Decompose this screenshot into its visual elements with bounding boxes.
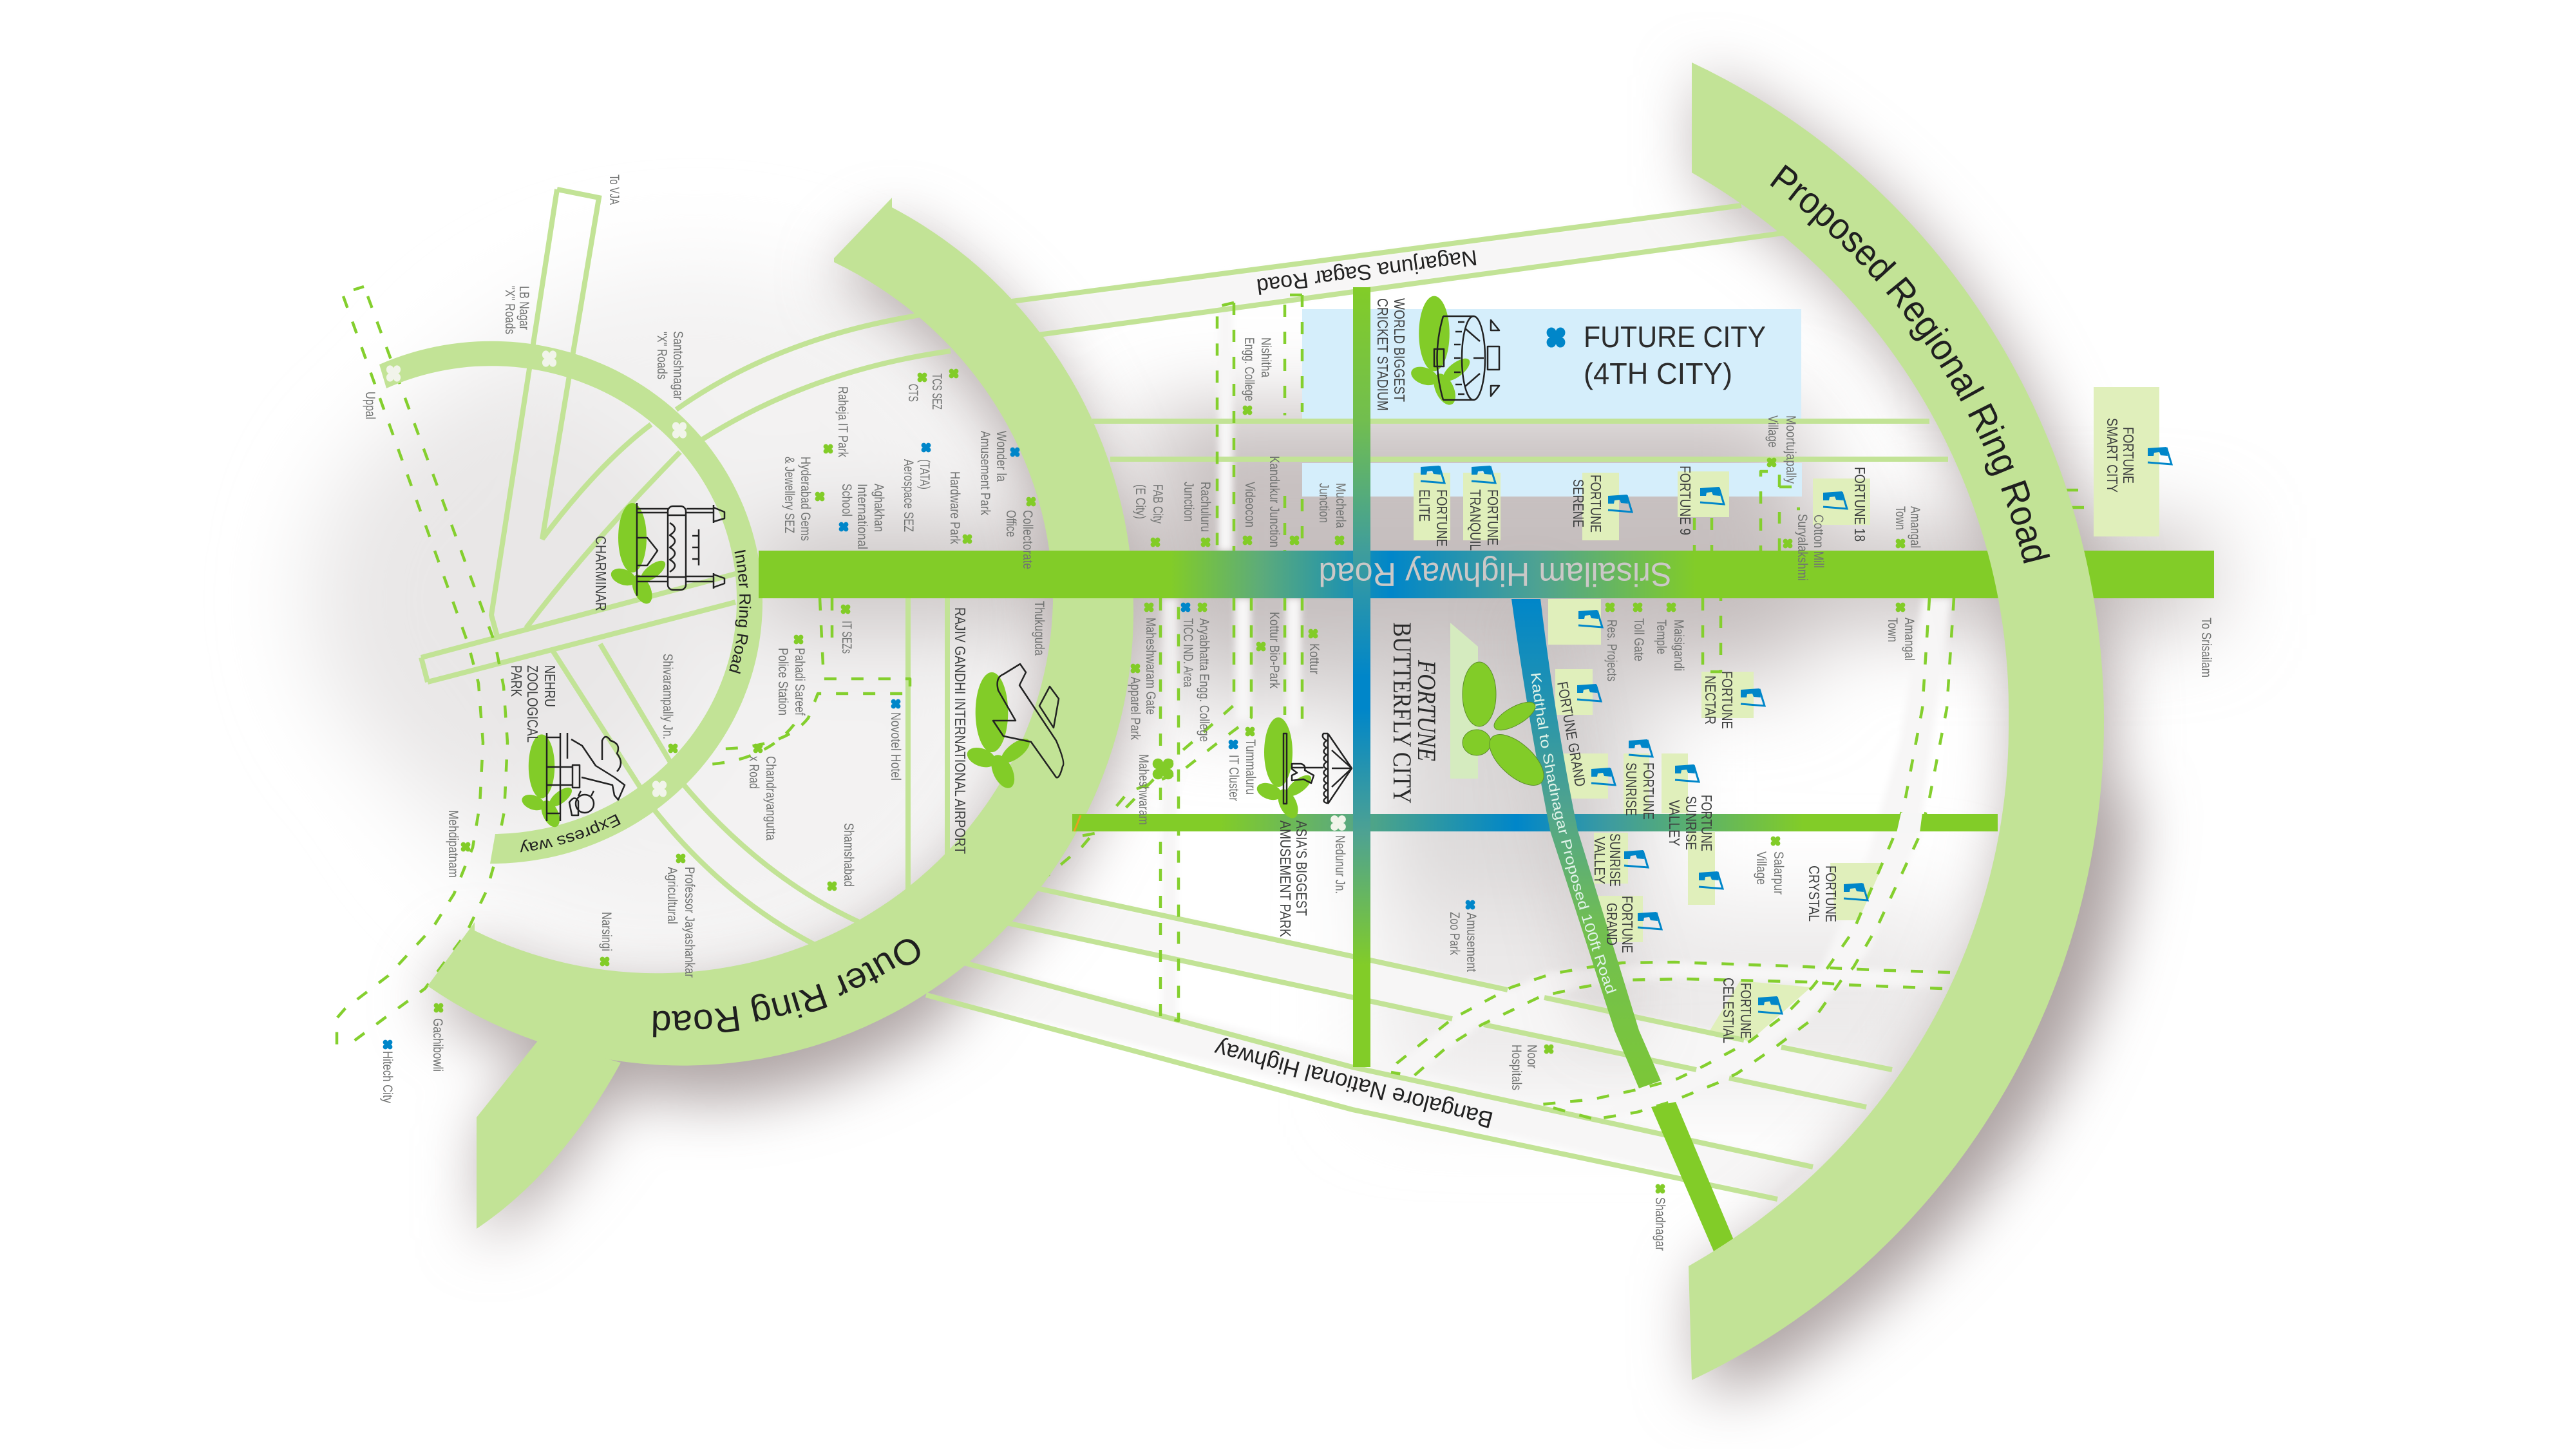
label: Amusement Zoo Park: Amusement xyxy=(1464,913,1479,972)
road name: Inner Ring Road: Inner Ring Road xyxy=(729,550,751,674)
label: Nedunur Jn.: Nedunur Jn. xyxy=(1332,835,1347,894)
road name: Bangalore National Highway: Bangalore National Highway xyxy=(1211,1036,1495,1133)
label: Fortune Elite: ELITE xyxy=(1416,489,1433,522)
label: Asia's biggest amusement park: ASIA'S BIGGEST xyxy=(1293,820,1310,916)
label: Fortune Grand upper: FORTUNE GRAND xyxy=(1554,680,1589,788)
soft grey ground shadows xyxy=(309,264,2208,1095)
road name: Kadthal to Shadnagar Proposed 100ft Road: Kadthal to Shadnagar Proposed 100ft Road xyxy=(1531,673,1616,994)
road name: Nagarjuna Sagar Road: Nagarjuna Sagar Road xyxy=(1255,245,1479,299)
markers: blue location points xyxy=(383,443,1475,1049)
label: Narsingi: Narsingi xyxy=(599,912,614,951)
label: Collectorate Office xyxy=(1003,510,1035,569)
label: Professor Jayashankar Agricultural: Agricultural xyxy=(665,867,679,924)
label: Chandrayangutta x Road: x Road xyxy=(746,756,761,789)
label: Fortune Sunrise: FORTUNE xyxy=(1640,762,1657,820)
label: Fortune Celestial: FORTUNE xyxy=(1738,983,1754,1039)
label: Salarpur Village: Salarpur xyxy=(1771,851,1786,895)
label: Fortune Celestial xyxy=(1720,978,1754,1043)
label: Fortune Nectar: FORTUNE xyxy=(1719,671,1736,729)
label: Hardware Park: Hardware Park xyxy=(947,471,962,544)
label: Gachibowli: Gachibowli xyxy=(430,1018,445,1072)
label: Maisigandi Temple: Maisigandi xyxy=(1671,620,1686,671)
label: FAB City: FAB City xyxy=(1150,484,1165,524)
label: Novotel Hotel: Novotel Hotel xyxy=(888,712,903,781)
label: Fortune Sunrise Valley xyxy=(1666,795,1715,851)
label: Maheshwaram Gate: Maheshwaram Gate xyxy=(1143,618,1158,715)
label: Pahadi Sareef Police Station: Police Station xyxy=(775,648,790,715)
label: Maisigandi Temple: Temple xyxy=(1654,620,1669,654)
label: Thukuguda: Thukuguda xyxy=(1032,601,1046,656)
heading: Future City callout: (4TH CITY) xyxy=(1584,357,1732,390)
label: Fortune Sunrise: SUNRISE xyxy=(1623,762,1640,816)
road name: Proposed Regional Ring Road: Proposed Regional Ring Road xyxy=(1770,165,2050,564)
label: Raheja IT Park: Raheja IT Park xyxy=(835,386,850,457)
label: Rachuluru Junction: Junction xyxy=(1181,482,1196,522)
label: Res. Projects: Res. Projects xyxy=(1604,620,1619,681)
label: Moortujapally Village: Village xyxy=(1765,415,1780,448)
label: Aghakhan International School xyxy=(839,484,886,549)
label: Fortune Tranquil: FORTUNE xyxy=(1484,489,1501,545)
label: Chandrayangutta x Road: Chandrayangutta xyxy=(763,756,778,840)
north-south road xyxy=(1353,287,1370,1067)
label: Wonder la Amusement Park: Amusement Park xyxy=(978,431,992,515)
logo: Fortune Butterfly large emblem xyxy=(1463,662,1552,794)
label: Amusement Zoo Park xyxy=(1447,912,1479,972)
label: Wonder la Amusement Park: Wonder la xyxy=(994,431,1009,482)
label: Nehru Zoological Park xyxy=(508,665,558,743)
label: Fortune Grand lower xyxy=(1604,896,1636,953)
label: Fortune Serene: FORTUNE xyxy=(1587,475,1604,533)
label: World biggest cricket stadium: WORLD BIGGEST xyxy=(1391,298,1408,402)
labels: places west of the outer ring xyxy=(363,175,1035,1103)
label: LB Nagar X Roads: LB Nagar xyxy=(516,286,531,330)
Kadthal road lower segment xyxy=(1651,1102,1735,1256)
label: Amusement Zoo Park: Zoo Park xyxy=(1447,912,1462,955)
road name: Outer Ring Road: Outer Ring Road xyxy=(653,939,920,1037)
label: Fortune Elite xyxy=(1416,489,1450,547)
outer ring road lower tail xyxy=(477,1040,621,1229)
icon: Charminar xyxy=(609,503,724,607)
label: Noor Hospitals: Noor xyxy=(1524,1045,1539,1068)
outer ring road xyxy=(428,198,1133,1066)
label: Fortune Crystal: CRYSTAL xyxy=(1806,866,1823,922)
label: Fortune Grand lower: FORTUNE xyxy=(1619,896,1636,953)
label: Santoshnagar X Roads: "X" Roads xyxy=(654,332,669,379)
label: Santoshnagar X Roads xyxy=(654,331,685,400)
label: Nishitha Engg. College: Nishitha xyxy=(1258,337,1273,377)
label: Mucherla Junction xyxy=(1316,483,1348,528)
label: Fortune Sunrise Valley: FORTUNE xyxy=(1698,795,1715,851)
label: Moortujapally Village xyxy=(1765,415,1798,484)
drop shadows of the ring roads xyxy=(428,74,2133,1394)
road names on the map xyxy=(520,165,2050,1133)
label: Mucherla Junction: Mucherla xyxy=(1333,483,1348,528)
label: TICC IND. Area: TICC IND. Area xyxy=(1180,618,1195,687)
label: Asia's biggest amusement park xyxy=(1277,820,1310,938)
label: Nishitha Engg. College xyxy=(1242,337,1273,401)
labels: landmarks xyxy=(508,298,1408,938)
label: Sunrise Valley: SUNRISE xyxy=(1607,833,1624,887)
label: Chandrayangutta x Road xyxy=(746,756,778,840)
label: Aghakhan International School: Aghakhan xyxy=(871,484,886,532)
label: Santoshnagar X Roads: Santoshnagar xyxy=(670,331,685,400)
panel: Future City light-blue zone xyxy=(1302,309,1802,497)
label: Professor Jayashankar Agricultural xyxy=(665,867,697,978)
label: Nehru Zoological Park: ZOOLOGICAL xyxy=(524,665,541,743)
heading: Fortune Butterfly City: BUTTERFLY CITY xyxy=(1388,622,1417,804)
label: Amangal Town south xyxy=(1885,618,1917,661)
dashed road gap through second road xyxy=(1897,813,1922,833)
label: Moortujapally Village: Moortujapally xyxy=(1783,415,1798,484)
label: Amangal Town south: Town xyxy=(1885,618,1900,642)
label: Fortune Sunrise Valley: VALLEY xyxy=(1666,800,1683,846)
label: Noor Hospitals: Hospitals xyxy=(1509,1045,1524,1090)
label: Charminar: CHARMINAR xyxy=(592,536,609,611)
roads: dashed proposed roads xyxy=(337,287,2093,1119)
label: Noor Hospitals xyxy=(1509,1045,1539,1090)
label: Fortune Nectar: NECTAR xyxy=(1702,676,1719,724)
label: IT Cluster: IT Cluster xyxy=(1226,755,1241,801)
heading: Fortune Butterfly City xyxy=(1388,622,1441,804)
label: FAB City xyxy=(1133,484,1165,524)
label: Mucherla Junction: Junction xyxy=(1316,483,1331,523)
label: Sunrise Valley: VALLEY xyxy=(1591,837,1608,884)
label: Rachuluru Junction xyxy=(1181,482,1213,532)
Srisailam highway band xyxy=(759,551,2214,598)
label: Fortune Serene: SERENE xyxy=(1570,479,1587,527)
label: Rachuluru Junction: Rachuluru xyxy=(1198,482,1213,532)
label: Hyderabad Gems and Jewellery SEZ: Hyderabad Gems xyxy=(798,457,813,541)
label: Fortune Nectar xyxy=(1702,671,1736,729)
label: Uppal: Uppal xyxy=(363,392,377,419)
label: Asia's biggest amusement park: AMUSEMENT PARK xyxy=(1277,820,1294,938)
label: Videocon: Videocon xyxy=(1242,482,1257,527)
label: Fortune 9: FORTUNE 9 xyxy=(1677,466,1694,535)
label: Fortune Sunrise xyxy=(1623,762,1657,820)
markers: green location points xyxy=(434,369,1905,1193)
label: Nehru Zoological Park: PARK xyxy=(508,665,525,697)
label: To VJA: To VJA xyxy=(607,175,621,205)
label: Toll Gate: Toll Gate xyxy=(1631,618,1646,661)
label: IT SEZs: IT SEZs xyxy=(839,621,854,654)
label: Fortune Serene xyxy=(1570,475,1604,533)
label: Fortune Elite: FORTUNE xyxy=(1434,489,1450,547)
label: Rajiv Gandhi International Airport: RAJIV GANDHI INTERNATIONAL AIRPORT xyxy=(952,607,969,854)
label: Fortune Tranquil: TRANQUIL xyxy=(1467,489,1484,551)
label: Fortune Celestial: CELESTIAL xyxy=(1720,978,1737,1043)
junction tick on second road xyxy=(1074,815,1081,831)
label: Hyderabad Gems and Jewellery SEZ: & Jewellery SEZ xyxy=(782,457,797,533)
label: Mehdipatnam: Mehdipatnam xyxy=(446,810,460,878)
label: Fortune Crystal: FORTUNE xyxy=(1823,866,1839,922)
label: Tummaluru: Tummaluru xyxy=(1243,739,1258,795)
label: Pahadi Sareef Police Station xyxy=(775,648,807,715)
heading: Future City callout xyxy=(1547,320,1766,390)
label: TCS SEZ: TCS SEZ xyxy=(929,374,944,410)
label: Shivarampally Jn.: Shivarampally Jn. xyxy=(660,654,675,739)
label: Fortune Smart City: FORTUNE xyxy=(2120,427,2137,484)
label: Aerospace SEZ TATA: Aerospace SEZ xyxy=(901,459,916,532)
label: Cotton Mill: Cotton Mill xyxy=(1811,515,1826,568)
label: Apparel Park: Apparel Park xyxy=(1128,677,1142,740)
icons: Fortune project flags xyxy=(1421,447,2172,1014)
label: Shamshabad: Shamshabad xyxy=(841,823,856,887)
label: Fortune 18: FORTUNE 18 xyxy=(1852,467,1868,542)
second east-west road xyxy=(1072,814,1998,831)
icon: carousel at Asia's biggest amusement park xyxy=(1255,717,1352,821)
label: Salarpur Village: Village xyxy=(1754,851,1768,885)
labels: Fortune projects xyxy=(1416,418,2137,1043)
icon: Nehru Zoo xyxy=(520,733,625,830)
label: Aerospace SEZ TATA xyxy=(901,459,932,532)
label: Maisigandi Temple xyxy=(1654,620,1686,671)
panel: Fortune project plots xyxy=(1414,387,2159,1041)
markers: white junctions on ring roads xyxy=(386,350,1346,831)
roads: thin light-green lines xyxy=(421,189,1948,1199)
label: Kandukur Junction: Kandukur Junction xyxy=(1267,456,1282,547)
road name: Srisailam Highway Road: Srisailam Highway Road xyxy=(1319,555,1672,592)
label: CTS: CTS xyxy=(905,384,920,402)
label: Collectorate Office: Office xyxy=(1003,510,1018,537)
label: To Srisailam: To Srisailam xyxy=(2199,618,2213,677)
icon: cricket stadium xyxy=(1408,296,1499,408)
label: Aghakhan International School: International xyxy=(855,484,869,549)
Kadthal road upper segment xyxy=(1511,599,1661,1088)
label: LB Nagar X Roads xyxy=(502,286,531,334)
label: Amangal Town north: Town xyxy=(1893,506,1908,530)
label: Wonder la Amusement Park xyxy=(978,431,1009,515)
label: Suryalakshmi: Suryalakshmi xyxy=(1795,514,1810,581)
label: World biggest cricket stadium xyxy=(1374,298,1408,411)
label: Nehru Zoological Park: NEHRU xyxy=(542,665,558,707)
label: Kottur: Kottur xyxy=(1307,643,1321,674)
proposed regional ring road xyxy=(1689,62,2104,1380)
label: Aerospace SEZ TATA: (TATA) xyxy=(917,459,932,489)
label: Nishitha Engg. College: Engg. College xyxy=(1242,337,1256,401)
label: Fortune Crystal xyxy=(1806,866,1839,922)
label: FAB City: (E City) xyxy=(1133,484,1148,519)
heading: Fortune Butterfly City: FORTUNE xyxy=(1412,659,1441,761)
label: Shadnagar: Shadnagar xyxy=(1653,1197,1667,1251)
label: Fortune Sunrise Valley: SUNRISE xyxy=(1683,796,1700,850)
label: Sunrise Valley xyxy=(1591,833,1624,887)
label: Fortune Smart City xyxy=(2104,418,2137,493)
label: Aryabhatta Engg. College: Aryabhatta Engg. College xyxy=(1197,618,1211,742)
white road interiors xyxy=(926,205,1951,1199)
label: Collectorate Office: Collectorate xyxy=(1020,510,1035,569)
label: World biggest cricket stadium: CRICKET STADIUM xyxy=(1374,298,1391,411)
label: Aghakhan International School: School xyxy=(839,484,854,516)
label: Salarpur Village xyxy=(1754,851,1786,895)
icon: airplane at Rajiv Gandhi International Airport xyxy=(965,664,1063,791)
label: LB Nagar X Roads: "X" Roads xyxy=(502,286,517,334)
label: Pahadi Sareef Police Station: Pahadi Sareef xyxy=(792,648,807,715)
label: Kottur Bio-Park: Kottur Bio-Park xyxy=(1267,612,1282,688)
label: Amangal Town north: Amangal xyxy=(1908,506,1922,548)
inner ring road xyxy=(379,341,762,864)
label: Fortune Grand lower: GRAND xyxy=(1604,903,1620,945)
label: Maheshwaram: Maheshwaram xyxy=(1136,754,1151,825)
label: Fortune Tranquil xyxy=(1467,489,1501,551)
road name: Express way: Express way xyxy=(520,814,621,853)
heading: Future City callout: FUTURE CITY xyxy=(1584,320,1766,354)
label: Professor Jayashankar Agricultural: Professor Jayashankar xyxy=(682,867,697,978)
label: Hitech City: Hitech City xyxy=(380,1051,395,1103)
labels: places between the ring roads xyxy=(1032,337,2213,1251)
label: Amangal Town north xyxy=(1893,506,1922,548)
label: Fortune Smart City: SMART CITY xyxy=(2104,418,2121,493)
label: Amangal Town south: Amangal xyxy=(1902,618,1917,661)
label: Hyderabad Gems and Jewellery SEZ xyxy=(782,457,813,541)
